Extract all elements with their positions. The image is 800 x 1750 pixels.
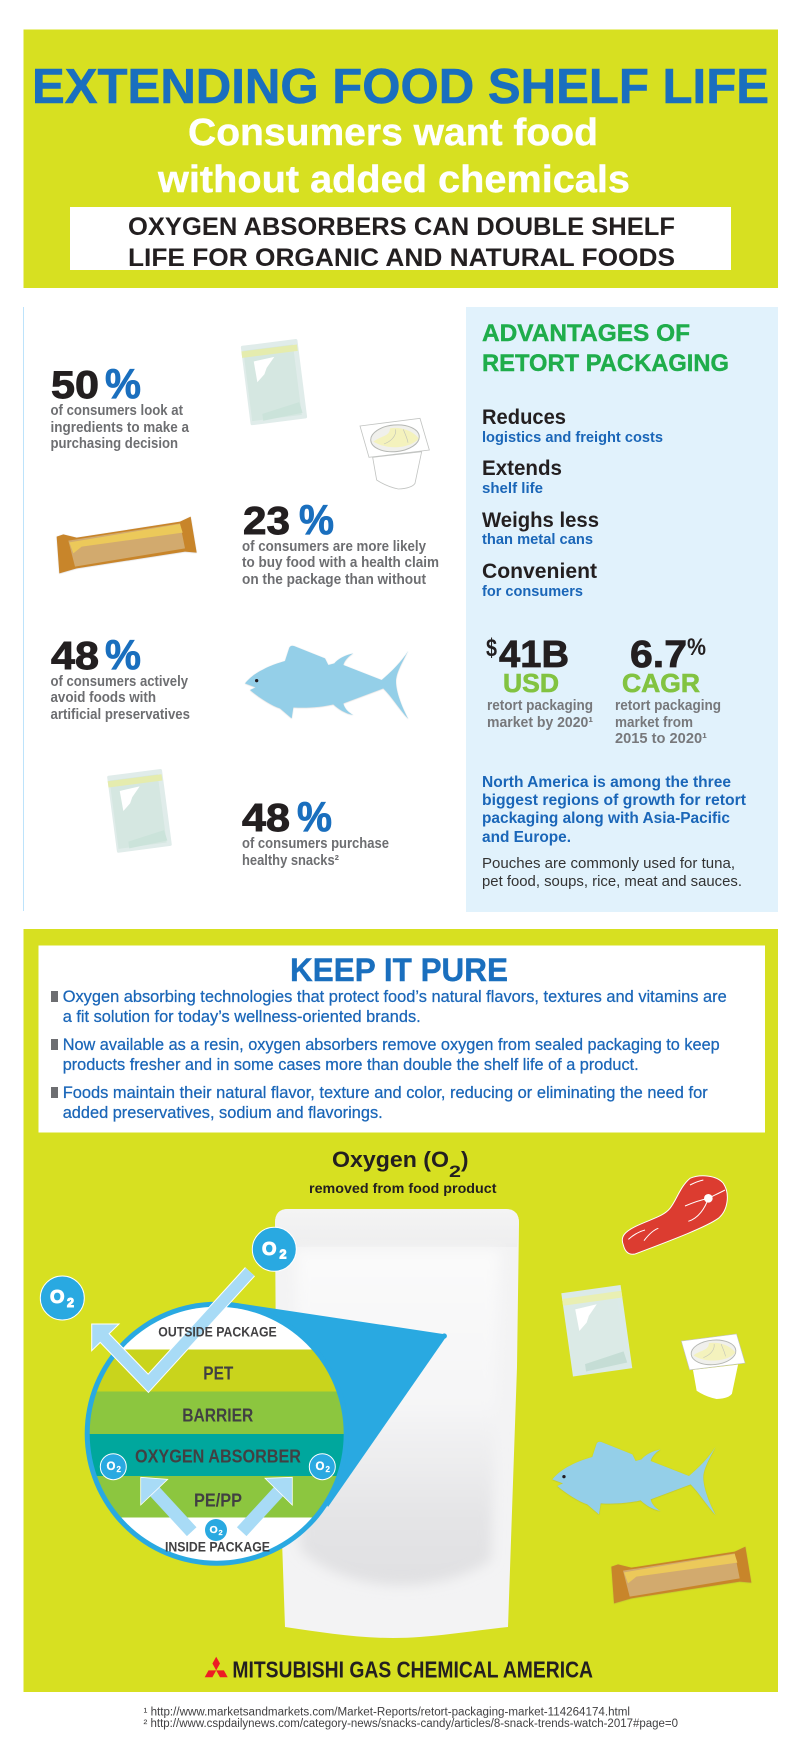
text: pouches: Pouches are commonly used for tuna, — [482, 856, 735, 872]
stat: 50 percent: 50 — [51, 364, 99, 407]
stat: 50 percent: % — [105, 360, 141, 407]
bullet 2 — [51, 1036, 720, 1074]
panel: keep it pure — [24, 929, 778, 1692]
layer labels — [135, 1324, 301, 1555]
bullet 1 — [51, 988, 727, 1026]
stat: 48 percent snacks: healthy snacks² — [242, 853, 339, 869]
text: pouches — [482, 856, 742, 890]
stat: 23 percent: % — [299, 496, 334, 543]
stat: 23 percent: on the package than without — [242, 572, 426, 588]
bullet 1: a fit solution for today’s wellness-oriented brands. — [63, 1008, 421, 1026]
stat: 23 percent: to buy food with a health claim — [242, 555, 439, 571]
icon: tuna — [245, 646, 408, 719]
stat: 41B USD: retort packaging — [487, 698, 593, 714]
advantage: weighs less: Weighs less — [482, 509, 599, 532]
O2 bubble: inside: O — [210, 1524, 218, 1536]
panel: advantages of retort packaging — [466, 307, 778, 912]
advantage: reduces: logistics and freight costs — [482, 430, 663, 446]
callout: oxygen absorbers: OXYGEN ABSORBERS CAN DOUBLE SHELF — [128, 213, 675, 241]
icon: tuna — [552, 1442, 716, 1515]
stat: 48 percent avoid: of consumers actively — [50, 674, 188, 690]
advantage: reduces — [482, 406, 663, 446]
O2 bubble: left: O — [50, 1287, 64, 1307]
stat: 23 percent: 23 — [243, 500, 290, 543]
text: north america: biggest regions of growth for retort — [482, 792, 746, 809]
stat: 48 percent avoid: % — [105, 631, 141, 678]
text: pouches: pet food, soups, rice, meat and sauces. — [482, 874, 742, 890]
heading: oxygen removed: Oxygen (O — [332, 1147, 449, 1172]
heading: oxygen removed: removed from food product — [309, 1181, 497, 1196]
icon: yogurt cup — [681, 1334, 745, 1399]
layer labels: OUTSIDE PACKAGE — [158, 1324, 277, 1340]
icon: snack bar — [57, 517, 197, 573]
stat: 41B USD — [486, 634, 593, 731]
advantage: convenient: Convenient — [482, 560, 597, 583]
footnotes — [144, 1707, 678, 1730]
stat: 50 percent — [50, 360, 190, 452]
stat: 48 percent snacks: 48 — [242, 797, 290, 840]
stat: 48 percent avoid: avoid foods with — [50, 690, 156, 706]
text: north america — [482, 774, 746, 846]
footnotes: ¹ http://www.marketsandmarkets.com/Market-Reports/retort-packaging-market-114264174.html — [144, 1707, 630, 1719]
stat: 6.7 percent CAGR: % — [687, 634, 706, 661]
O2 bubble: absorber right: 2 — [326, 1465, 330, 1474]
advantage: weighs less — [482, 509, 599, 548]
heading: oxygen removed: ) — [461, 1147, 468, 1172]
callout: oxygen absorbers — [70, 207, 731, 272]
bullet 1: Oxygen absorbing technologies that protect food’s natural flavors, textures and vitamins are — [63, 988, 727, 1006]
stat: 6.7 percent CAGR: CAGR — [622, 668, 700, 698]
layer labels: INSIDE PACKAGE — [165, 1539, 270, 1555]
O2 bubble: top: 2 — [280, 1248, 286, 1262]
stat: 6.7 percent CAGR: retort packaging — [615, 698, 721, 714]
stat: 41B USD: 41B — [499, 634, 569, 676]
stat: 48 percent snacks: % — [297, 793, 332, 840]
O2 bubble: absorber right — [309, 1454, 335, 1480]
O2 bubble: top: O — [262, 1239, 276, 1259]
advantage: weighs less: than metal cans — [482, 532, 593, 548]
bullet 2: products fresher and in some cases more than double the shelf life of a product. — [63, 1056, 639, 1074]
stat: 41B USD: USD — [503, 668, 559, 698]
heading: KEEP IT PURE — [290, 952, 508, 988]
panel: header — [24, 30, 778, 288]
diagram: packaging layers — [40, 1227, 360, 1568]
O2 bubble: inside — [205, 1519, 227, 1541]
stat: 48 percent avoid — [50, 631, 190, 723]
stat: 48 percent avoid: 48 — [51, 635, 99, 678]
text: north america: packaging along with Asia-Pacific — [482, 810, 730, 827]
heading: oxygen removed — [309, 1147, 497, 1196]
icon: snack bar — [611, 1547, 751, 1603]
advantage: convenient — [482, 560, 597, 600]
heading: oxygen removed: 2 — [449, 1162, 461, 1181]
heading — [482, 320, 729, 377]
icon: pouch — [107, 769, 172, 853]
layer labels: BARRIER — [182, 1406, 253, 1426]
stat: 50 percent: purchasing decision — [50, 436, 178, 452]
O2 bubble: top — [252, 1227, 296, 1271]
O2 bubble: absorber left: 2 — [116, 1465, 122, 1474]
O2 bubble: absorber right: O — [316, 1461, 324, 1473]
arrow: oxygen to absorber left — [141, 1477, 192, 1532]
O2 bubble: left — [40, 1276, 84, 1320]
advantage: extends — [482, 457, 562, 497]
heading: ADVANTAGES OF — [482, 320, 690, 347]
bullet 3 — [51, 1084, 708, 1122]
logo: mitsubishi gas chemical america: MITSUBISHI GAS CHEMICAL AMERICA — [232, 1656, 593, 1682]
stat: 41B USD: $ — [486, 634, 497, 662]
layer labels: PE/PP — [194, 1491, 242, 1511]
text box — [38, 946, 765, 1132]
bullet 2: Now available as a resin, oxygen absorbers remove oxygen from sealed packaging to keep — [63, 1036, 720, 1054]
stat: 23 percent — [242, 496, 439, 588]
stat: 41B USD: market by 2020¹ — [487, 715, 593, 731]
icon: meat — [622, 1176, 727, 1254]
icon: pouch — [561, 1285, 632, 1376]
icon: yogurt cup — [360, 418, 429, 489]
stat: 50 percent: of consumers look at — [50, 403, 183, 419]
text: north america: and Europe. — [482, 829, 571, 846]
layer labels: OXYGEN ABSORBER — [135, 1447, 301, 1467]
layer labels: PET — [203, 1363, 233, 1383]
title: EXTENDING FOOD SHELF LIFE — [32, 60, 769, 114]
stat: 50 percent: ingredients to make a — [50, 420, 190, 436]
icon: pouch — [241, 339, 307, 425]
stat: 48 percent avoid: artificial preservatives — [50, 707, 190, 723]
O2 bubble: absorber left — [100, 1454, 126, 1480]
advantage: convenient: for consumers — [482, 584, 583, 600]
advantage: extends: shelf life — [482, 481, 543, 497]
stat: 6.7 percent CAGR — [615, 634, 721, 747]
arrow: oxygen to absorber right — [242, 1477, 292, 1532]
stat: 6.7 percent CAGR: market from — [615, 715, 693, 731]
stat: 6.7 percent CAGR: 6.7 — [630, 634, 687, 676]
stat: 48 percent snacks — [242, 793, 389, 869]
heading: RETORT PACKAGING — [482, 350, 729, 377]
callout: oxygen absorbers: LIFE FOR ORGANIC AND NATURAL FOODS — [128, 244, 675, 272]
subtitle — [157, 112, 630, 201]
O2 bubble: left: 2 — [67, 1296, 74, 1310]
bullet 3: Foods maintain their natural flavor, texture and color, reducing or eliminating the need for — [63, 1084, 708, 1102]
stat: 6.7 percent CAGR: 2015 to 2020¹ — [615, 731, 707, 747]
bullet 3: added preservatives, sodium and flavorings. — [63, 1104, 383, 1122]
stat: 23 percent: of consumers are more likely — [242, 539, 426, 555]
stat: 48 percent snacks: of consumers purchase — [242, 836, 389, 852]
text: north america: North America is among the three — [482, 774, 731, 791]
advantage: reduces: Reduces — [482, 406, 566, 429]
O2 bubble: inside: 2 — [218, 1528, 223, 1537]
icon: large pouch — [275, 1209, 519, 1638]
footnotes: ² http://www.cspdailynews.com/category-news/snacks-candy/articles/8-snack-trends-watch-2017#page=0 — [144, 1718, 678, 1730]
O2 bubble: absorber left: O — [106, 1461, 116, 1473]
subtitle: Consumers want food — [188, 112, 598, 154]
advantage: extends: Extends — [482, 457, 562, 480]
arrow: oxygen out — [92, 1272, 250, 1383]
callout cone — [227, 1302, 447, 1507]
subtitle: without added chemicals — [157, 159, 630, 201]
